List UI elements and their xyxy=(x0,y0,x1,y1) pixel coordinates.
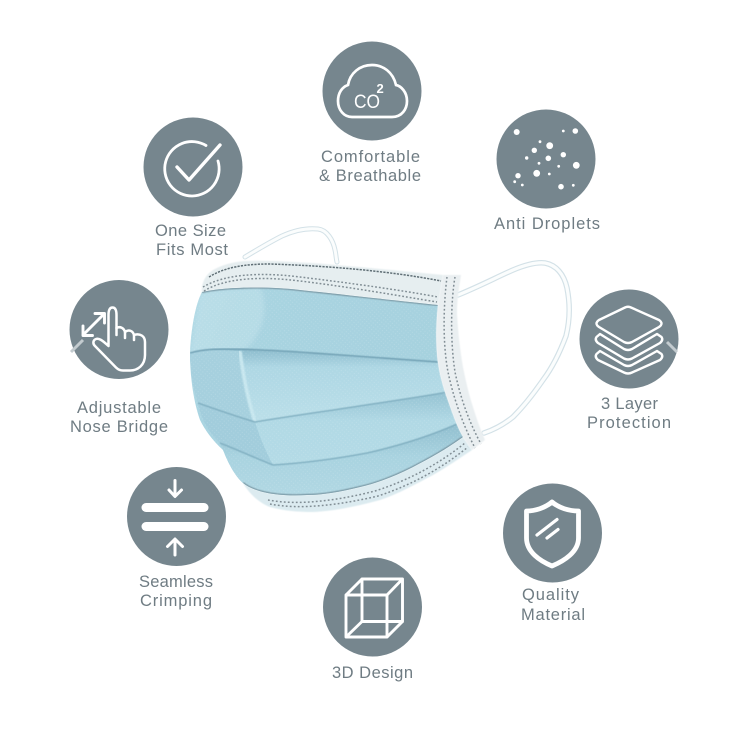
crease shadows xyxy=(190,349,438,362)
pleat 3 xyxy=(256,392,456,464)
icon: CO2 cloud xyxy=(338,65,407,117)
top binding band xyxy=(202,261,443,305)
icon: CO2 cloud: CO xyxy=(354,92,380,113)
label: Adjustable xyxy=(77,399,161,417)
ear loop right xyxy=(458,263,569,433)
label xyxy=(155,222,228,259)
label: Nose Bridge xyxy=(70,418,168,436)
label xyxy=(587,395,671,432)
label: Anti Droplets xyxy=(494,215,600,233)
mask pleated body xyxy=(190,288,463,496)
feature: three layer protection xyxy=(580,290,678,432)
label: Fits Most xyxy=(156,241,228,259)
feature: quality material xyxy=(503,484,602,624)
feature: adjustable nose bridge xyxy=(70,280,168,436)
pleat 4 xyxy=(223,424,463,496)
label xyxy=(521,586,585,624)
label xyxy=(319,148,421,185)
feature: 3D design xyxy=(323,558,422,682)
label: Comfortable xyxy=(321,148,420,166)
icon: wireframe cube xyxy=(346,579,402,637)
label: Material xyxy=(521,606,585,624)
label xyxy=(70,399,168,436)
icon: CO2 cloud: 2 xyxy=(376,81,384,96)
feature: comfortable and breathable xyxy=(319,42,422,185)
binding stitch dots xyxy=(203,264,481,507)
bottom binding band xyxy=(243,437,472,512)
feature: one size fits most xyxy=(144,118,242,259)
ear loop left xyxy=(245,229,337,262)
icon: check mark in circle xyxy=(165,142,220,196)
feature: seamless crimping xyxy=(127,467,226,610)
label: Seamless xyxy=(139,573,213,591)
label: Protection xyxy=(587,414,671,432)
icon: stacked layers xyxy=(596,307,662,374)
icon: hand with resize arrow xyxy=(83,308,145,370)
icon: shield xyxy=(526,502,578,566)
pleat 2 xyxy=(190,349,448,422)
label: & Breathable xyxy=(319,167,421,185)
label: 3D Design xyxy=(332,664,413,682)
mask illustration xyxy=(185,229,569,512)
feature: anti droplets xyxy=(494,110,600,233)
infographic canvas xyxy=(70,42,678,682)
label xyxy=(139,573,213,610)
label: Quality xyxy=(522,586,580,604)
label: 3 Layer xyxy=(601,395,658,413)
side binding band xyxy=(436,275,485,450)
label: Crimping xyxy=(140,592,212,610)
label: One Size xyxy=(155,222,226,240)
icon: droplets xyxy=(513,128,580,190)
icon: compress bars with arrows xyxy=(142,480,208,555)
